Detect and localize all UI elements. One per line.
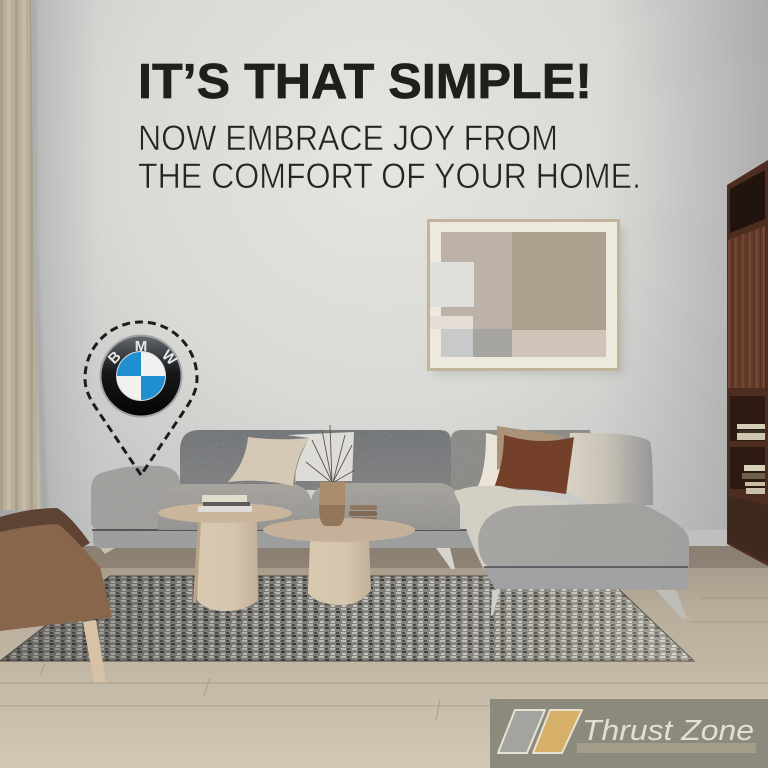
subheading [138, 119, 641, 196]
pillow: white rear [478, 433, 500, 486]
watermark wordmark: Thrust Zone [582, 715, 754, 747]
vase with branches [306, 425, 355, 526]
map pin with BMW logo [85, 322, 197, 475]
rug [0, 576, 694, 661]
BMW logo: W [158, 347, 181, 369]
chaise cushion [478, 503, 689, 567]
sofa back cushions [180, 430, 600, 490]
bookcase lower cabinet [728, 496, 768, 562]
bowl stack [349, 505, 377, 527]
bookcase wood panel [728, 226, 765, 388]
floor [0, 546, 768, 768]
sofa seat cushions [158, 483, 460, 530]
BMW logo: B [105, 348, 125, 368]
dashed pin outline [85, 322, 197, 475]
sofa left arm [91, 466, 180, 530]
watermark: Thrust Zone [490, 699, 768, 768]
bookcase middle shelf [730, 396, 765, 441]
pillow: cream [228, 437, 310, 486]
coffee table: left [158, 495, 292, 611]
re-drawn vase foot over the table [319, 505, 345, 526]
pillow: white checked [287, 432, 354, 484]
framed artwork [427, 219, 624, 374]
pillow: rust [494, 435, 574, 494]
chaise base [483, 567, 688, 589]
sofa [91, 426, 689, 618]
coffee table: right [263, 518, 415, 605]
armchair body [0, 524, 112, 631]
bookcase upper open shelf [730, 170, 765, 233]
bookcase [727, 160, 768, 566]
armchair leg [83, 620, 106, 683]
chaise upper seat [454, 486, 590, 570]
subheading: THE COMFORT OF YOUR HOME. [138, 157, 641, 196]
pillow: tan rear [497, 426, 565, 470]
sofa right arm [567, 433, 653, 505]
BMW logo: M [135, 338, 147, 355]
sofa legs [100, 548, 455, 569]
armchair [0, 508, 112, 683]
watermark logo [498, 710, 582, 753]
bookcase lower shelf [730, 447, 765, 494]
wall background [0, 0, 768, 560]
books [198, 495, 252, 512]
sofa base [93, 530, 478, 548]
headline: IT’S THAT SIMPLE! [138, 54, 592, 109]
chaise legs [491, 590, 687, 618]
BMW logo [100, 334, 182, 418]
subheading: NOW EMBRACE JOY FROM [138, 119, 558, 158]
curtain [0, 0, 48, 510]
armchair back [0, 508, 90, 560]
